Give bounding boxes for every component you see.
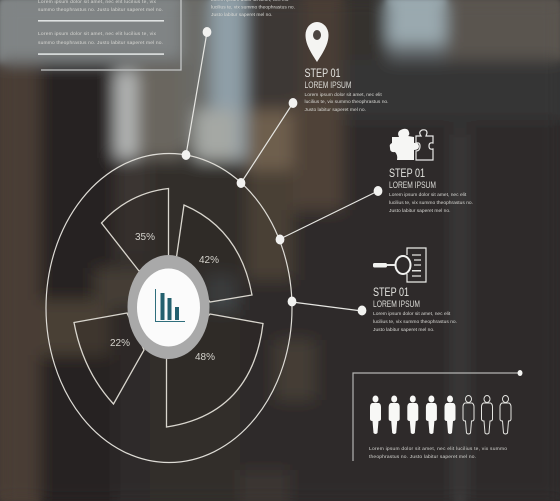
outer ring with connectors (46, 32, 378, 462)
step 1 text (304, 66, 388, 113)
top text fragment: lucilius te, vix summo theophrastus no. (211, 4, 295, 10)
step 1 text: Lorem ipsum dolor sit amet, nec elit (304, 92, 382, 98)
step 3 text: Lorem ipsum dolor sit amet, nec elit (373, 311, 451, 317)
step 2 text: Justo labitur saperet mel no. (389, 208, 450, 214)
step 3 text: LOREM IPSUM (373, 299, 420, 309)
step 3 text: STEP 01 (373, 285, 409, 299)
top-left text panel: summo theophrastus no. Justo labitur saperet mel no. (38, 40, 163, 46)
top-left text panel: summo theophrastus no. Justo labitur saperet mel no. (38, 7, 163, 13)
step 2: puzzle icon (390, 129, 433, 160)
step 3 text: Justo labitur saperet mel no. (373, 327, 434, 333)
step 2 text (389, 166, 473, 214)
step 1 text: lucilius te, vix summo theophrastus no. (304, 99, 388, 105)
center hub chart icon (128, 255, 210, 359)
step 3: magnifier document icon (373, 248, 426, 282)
percentage labels: 42% (199, 255, 219, 266)
step 1 text: STEP 01 (304, 66, 341, 80)
top text fragment (211, 0, 295, 18)
filled people (370, 396, 456, 434)
percentage labels: 48% (195, 352, 215, 363)
bottom-right people panel: theophrastus no. Justo labitur saperet mel no. (369, 454, 476, 460)
step 2 text: Lorem ipsum dolor sit amet, nec elit (389, 192, 467, 198)
segment 48% (166, 314, 263, 427)
step 1 text: LOREM IPSUM (304, 80, 352, 90)
top-left text panel: Lorem ipsum dolor sit amet, nec elit lucilius te, vix (38, 31, 157, 37)
top-left text panel (38, 0, 181, 70)
step 2 text: LOREM IPSUM (389, 180, 436, 190)
bottom-right people panel (353, 370, 522, 461)
step 2 text: STEP 01 (389, 166, 425, 180)
bottom-right people panel: Lorem ipsum dolor sit amet, nec elit lucilius te, vix summo (369, 446, 507, 452)
percentage labels (110, 232, 219, 363)
step 3 text (373, 285, 457, 333)
step 1: pin icon (306, 22, 328, 62)
outlined people (463, 396, 511, 434)
percentage labels: 22% (110, 338, 130, 349)
segment 35% (102, 188, 168, 271)
step 2 text: lucilius te, vix summo theophrastus no. (389, 200, 473, 206)
segment 42% (176, 205, 252, 302)
connector dots (182, 27, 382, 316)
percentage labels: 35% (135, 232, 155, 243)
step 1 text: Justo labitur saperet mel no. (304, 107, 366, 113)
segment 22% (74, 313, 144, 404)
top text fragment: Justo labitur saperet mel no. (211, 12, 272, 18)
step 3 text: lucilius te, vix summo theophrastus no. (373, 319, 457, 325)
pie segments (74, 188, 263, 427)
top-left text panel: Lorem ipsum dolor sit amet, nec elit lucilius te, vix (38, 0, 157, 5)
